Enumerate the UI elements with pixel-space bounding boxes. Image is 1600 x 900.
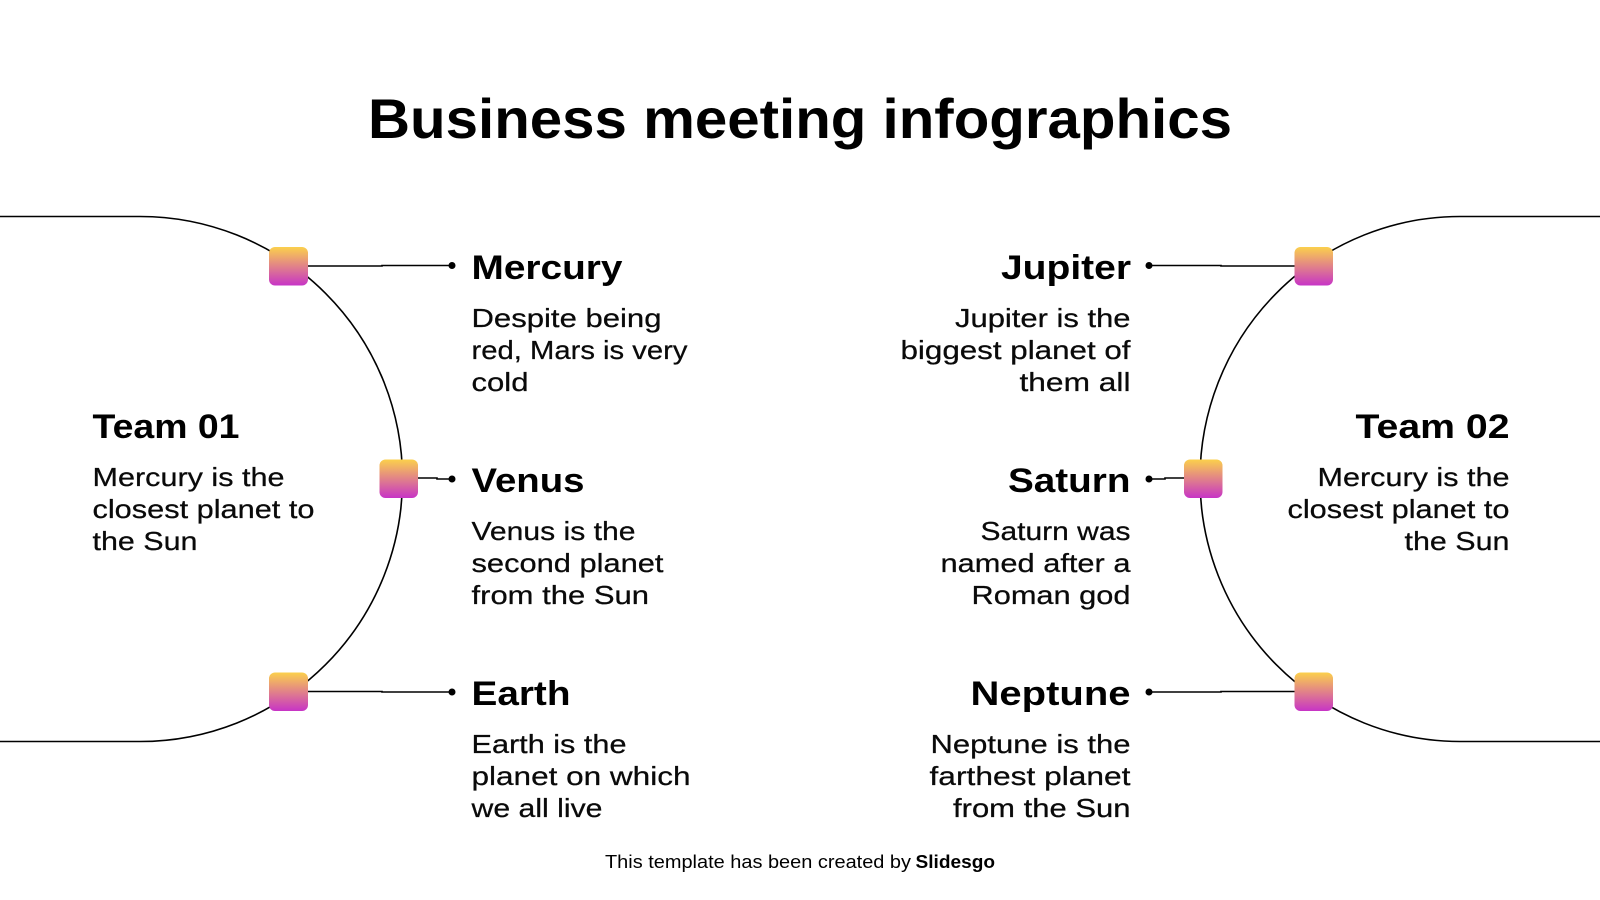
block: Jupiter — [900, 249, 1131, 397]
block: Neptune — [930, 675, 1131, 823]
block: Jupiter: them all — [1020, 367, 1130, 397]
node: Neptune — [1294, 672, 1333, 711]
left arc line — [0, 216, 402, 742]
block: Mercury: Mercury — [472, 249, 623, 287]
footer credit: This template has been created by — [605, 852, 911, 872]
block: Neptune: farthest planet — [930, 761, 1131, 791]
block: Team 01: the Sun — [92, 526, 198, 556]
connector: Neptune — [1146, 688, 1295, 696]
block: Neptune: Neptune — [970, 675, 1130, 713]
block: Neptune: from the Sun — [953, 793, 1130, 823]
block: Team 01 — [92, 408, 314, 556]
block: Mercury: red, Mars is very — [472, 335, 688, 365]
footer credit: Slidesgo — [916, 852, 995, 872]
node: Saturn — [1184, 460, 1222, 498]
block: Venus: Venus — [472, 462, 584, 500]
block: Team 02: Mercury is the — [1318, 462, 1510, 492]
block: Team 01: Team 01 — [92, 408, 240, 446]
block: Earth: we all live — [470, 793, 602, 823]
block: Neptune: Neptune is the — [930, 729, 1130, 759]
block: Team 01: Mercury is the — [92, 462, 284, 492]
block: Mercury: Despite being — [472, 303, 662, 333]
block: Saturn: Saturn was — [980, 516, 1130, 546]
connector: Jupiter — [1146, 262, 1295, 269]
connector: Saturn — [1146, 476, 1184, 482]
block: Venus: from the Sun — [472, 580, 649, 610]
title: Business meeting infographics — [368, 87, 1232, 150]
block: Earth: Earth is the — [472, 729, 626, 759]
node: Earth — [269, 672, 308, 711]
block: Team 01: closest planet to — [92, 494, 314, 524]
block: Saturn: Roman god — [972, 580, 1130, 610]
node: Jupiter — [1294, 247, 1333, 286]
block: Team 02: closest planet to — [1288, 494, 1510, 524]
block: Jupiter: Jupiter — [1001, 249, 1131, 287]
node: Mercury — [269, 247, 308, 286]
block: Earth: Earth — [472, 675, 570, 713]
block: Saturn: named after a — [940, 548, 1131, 578]
block: Mercury — [472, 249, 688, 397]
block: Team 02 — [1288, 408, 1510, 556]
block: Venus: second planet — [472, 548, 664, 578]
block: Team 02: the Sun — [1404, 526, 1510, 556]
block: Jupiter: Jupiter is the — [955, 303, 1130, 333]
right arc line — [1200, 216, 1600, 742]
connector: Mercury — [308, 262, 456, 269]
block: Mercury: cold — [472, 367, 528, 397]
connector: Venus — [418, 476, 456, 482]
block: Earth — [470, 675, 690, 823]
node: Venus — [380, 460, 418, 498]
block: Saturn — [940, 462, 1131, 610]
block: Jupiter: biggest planet of — [900, 335, 1131, 365]
block: Saturn: Saturn — [1008, 462, 1130, 500]
block: Venus — [472, 462, 664, 610]
block: Earth: planet on which — [472, 761, 690, 791]
block: Team 02: Team 02 — [1356, 408, 1510, 446]
connector: Earth — [308, 688, 456, 696]
block: Venus: Venus is the — [472, 516, 636, 546]
